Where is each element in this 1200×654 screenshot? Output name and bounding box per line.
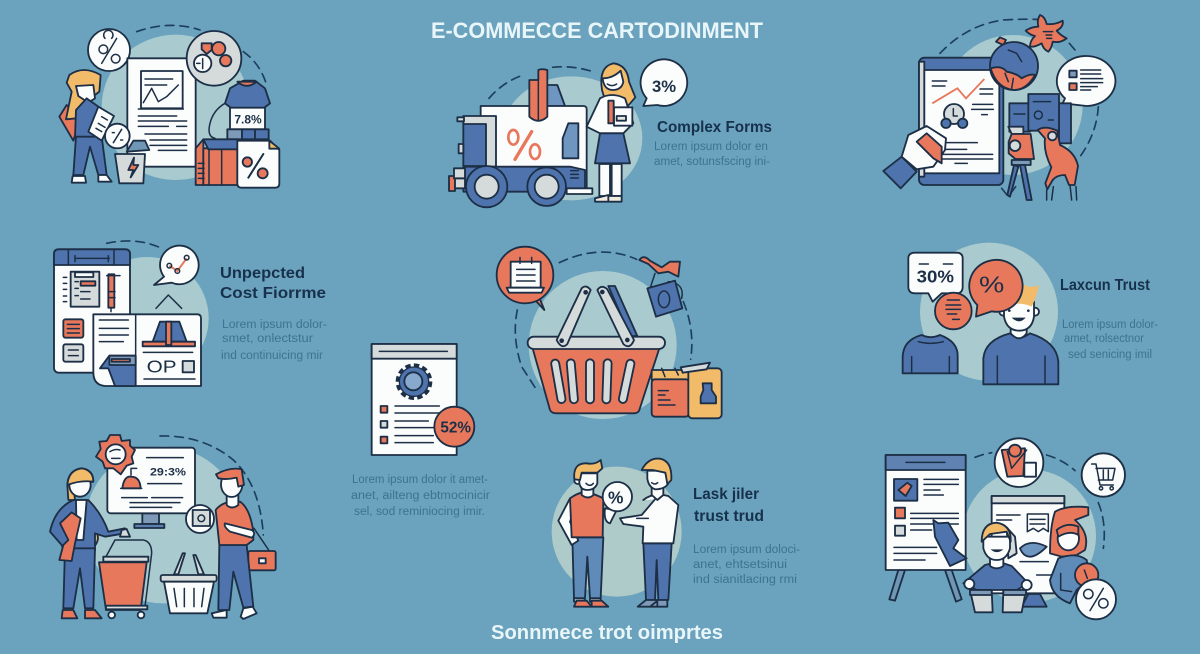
lock with key: [639, 257, 682, 317]
panel: complex forms: [449, 59, 772, 207]
panel: center document with 52%: [351, 344, 490, 518]
basket circle: [995, 438, 1043, 487]
white basket: [161, 553, 217, 613]
description: anet, ehtsetsinui: [693, 559, 787, 571]
bubble 30%: 30%: [917, 267, 954, 287]
icon: coins circle: [187, 31, 241, 86]
description: [654, 141, 770, 168]
presentation board: [886, 455, 967, 602]
description: Lorem ipsum dolor en: [654, 141, 768, 153]
buildings: [1009, 94, 1071, 143]
illustration: two people with percent: [552, 459, 682, 607]
open booklet: OP: [147, 356, 177, 376]
app window: [54, 249, 130, 373]
panel: bottom-right board and team: [886, 438, 1125, 619]
right man: [620, 459, 678, 607]
panel: top-right tablet, globe and camera: [883, 15, 1115, 200]
basket: [528, 286, 665, 413]
shirt and price tag: 7.8%: [234, 112, 262, 126]
description: ind continuicing mir: [221, 350, 323, 362]
cart circle: [1082, 453, 1125, 497]
heading: Unpepcted: [220, 265, 305, 282]
heading: [220, 265, 326, 302]
shopping cart orange: [99, 529, 152, 618]
panel: shopping basket: [497, 247, 722, 419]
panel: top-left shopper and document: [59, 25, 279, 188]
description: amet, rolsectnor: [1064, 333, 1144, 345]
hand holding card: [883, 126, 946, 188]
panel: lacking trust pair: [552, 459, 800, 607]
heading: trust trud: [694, 508, 764, 525]
description: [221, 319, 327, 362]
globe: [990, 37, 1038, 90]
heading: Cost Fiorrme: [220, 285, 326, 302]
panel: bottom-left shoppers with monitor: [50, 435, 276, 619]
illustration: truck and woman: [449, 59, 687, 207]
orange animal: [1038, 128, 1078, 200]
heading: [693, 486, 764, 525]
document with gear: [372, 344, 474, 455]
description: [351, 474, 490, 518]
chevron: [156, 295, 182, 308]
description: sel, sod reminiocing imir.: [354, 506, 485, 518]
tablet document: [919, 58, 1003, 185]
panel: unexpected cost: [54, 241, 327, 386]
bubble percent: [969, 260, 1023, 317]
description: ind sianitlacing rmi: [693, 574, 797, 586]
heading: Complex Forms: [657, 119, 772, 136]
orange boxes and percent card: [196, 139, 279, 188]
illustration: person and speech bubbles: [903, 243, 1058, 384]
speech bubble 3%: [641, 59, 687, 106]
bubble 30%: [908, 253, 963, 302]
open booklet: [93, 314, 201, 386]
woman: [50, 468, 125, 618]
description: sed senicing imil: [1068, 349, 1152, 361]
percent circle: [603, 482, 632, 523]
monitor: 29:3%: [150, 467, 186, 479]
percent circle: %: [608, 487, 623, 507]
badge 52%: 52%: [440, 419, 471, 436]
monitor with content: [992, 496, 1064, 607]
shirt: [903, 335, 958, 373]
gear: [96, 435, 135, 474]
woman: [1050, 507, 1116, 619]
document with chart: [127, 58, 196, 167]
left man: [558, 460, 608, 607]
shirt and price tag: [209, 81, 270, 139]
illustration: forms and documents: [54, 241, 209, 386]
man at laptop: [963, 523, 1032, 612]
bubble list: [935, 293, 972, 329]
heading: Laxcun Trust: [1060, 277, 1151, 294]
description: smet, onlectstur: [222, 333, 313, 345]
chart bubble: [154, 246, 199, 285]
gear badge: [1026, 15, 1067, 52]
description: anet, ailteng ebtmocinicir: [351, 490, 490, 502]
description: Lorem ipsum doloci-: [693, 544, 800, 556]
title: E-COMMECCE CARTODINMENT: [431, 18, 764, 43]
description: Lorem ipsum dolor-: [222, 319, 327, 331]
bubble percent: %: [979, 271, 1004, 297]
list speech bubble: [1057, 56, 1115, 106]
bubble with note: [497, 247, 553, 310]
camera on tripod: [1007, 127, 1034, 200]
boxes: [652, 363, 722, 418]
smiling person: [983, 283, 1058, 384]
icon: percent circle: [88, 29, 130, 71]
person with clipboard: [59, 70, 130, 183]
description: Lorem ipsum dolor-: [1062, 319, 1158, 331]
bottom caption: Sonnmece trot oimprtes: [491, 622, 723, 644]
description: [1062, 319, 1158, 361]
panel: lacking trust: [903, 243, 1158, 384]
bin with lightning: [115, 141, 149, 183]
woman with clipboard: [587, 63, 635, 202]
speech bubble 3%: 3%: [652, 77, 676, 96]
description: [693, 544, 800, 586]
description: amet, sotunsfscing ini-: [654, 156, 770, 168]
man: [186, 469, 276, 619]
monitor: [107, 448, 195, 528]
heading: Lask jiler: [693, 486, 759, 503]
percent sign on truck: [508, 130, 540, 159]
description: Lorem ipsum dolor it amet-: [352, 474, 488, 486]
